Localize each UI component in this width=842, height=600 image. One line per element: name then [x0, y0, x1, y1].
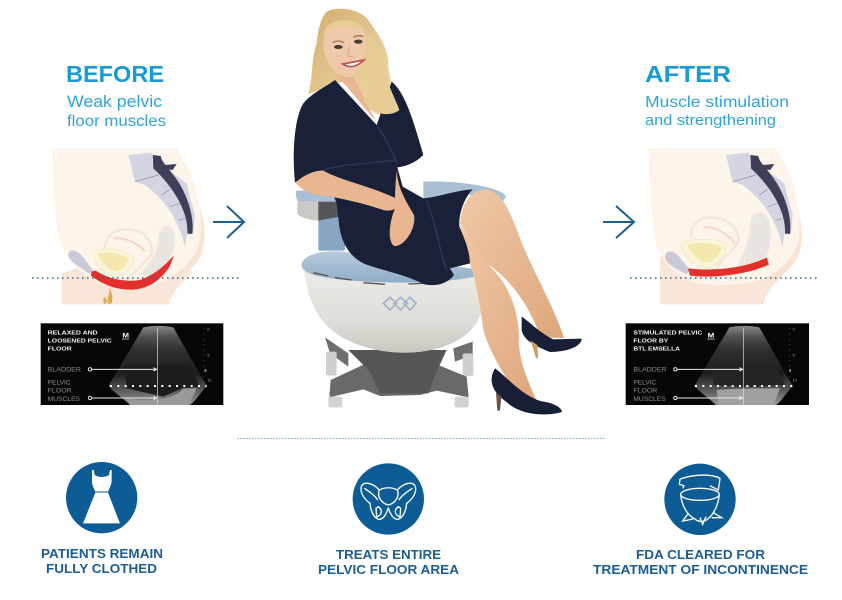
hair back: [308, 9, 400, 116]
caption: fda cleared: TREATMENT OF INCONTINENCE: [593, 562, 808, 577]
icon: dress: [66, 462, 137, 533]
face: [323, 23, 367, 77]
caption: patients remain fully clothed: [41, 546, 163, 576]
ultrasound panel: after: STIMULATED PELVIC: [633, 330, 702, 336]
arms and hands: [296, 168, 414, 246]
arrow: before to device: [213, 206, 244, 238]
heading: after: AFTER: [645, 61, 731, 87]
dotted line: after: [630, 277, 819, 279]
caption: fda cleared: FDA CLEARED FOR: [636, 547, 766, 562]
dotted divider: [237, 438, 605, 440]
ultrasound panel: before: MUSCLES: [48, 396, 80, 403]
caption: treats entire pelvic floor area: [318, 547, 460, 577]
heading: after: Muscle stimulation: [645, 94, 789, 111]
icon: pelvis: [353, 463, 424, 535]
ultrasound panel: after: FLOOR BY: [633, 338, 669, 344]
ultrasound panel: before: 0: [207, 328, 209, 332]
caption: fda cleared: [593, 547, 808, 577]
heading: before: floor muscles: [67, 113, 166, 130]
arrow: device to after: [603, 206, 634, 238]
icon: chair: [664, 464, 736, 535]
dress folds: [323, 125, 447, 270]
ultrasound panel: before: BLADDER: [48, 367, 81, 374]
ultrasound panel: before: [41, 323, 223, 405]
dotted line: before: [32, 277, 241, 279]
ultrasound panel: after: BLADDER: [633, 367, 667, 374]
ultrasound panel: after: [626, 323, 809, 405]
legs and shoes: [459, 189, 582, 414]
heading: before: [66, 61, 166, 130]
ultrasound panel: before: 10: [207, 379, 211, 383]
heading: before: BEFORE: [66, 61, 164, 87]
hair front: [324, 20, 399, 114]
ultrasound panel: after: BTL EMSELLA: [633, 346, 680, 352]
ultrasound panel: before: FLOOR: [48, 387, 72, 394]
ultrasound panel: after: PELVIC: [633, 379, 657, 386]
ultrasound panel: after: 5: [793, 354, 795, 358]
chair: [296, 181, 506, 407]
ultrasound panel: before: M: [122, 332, 130, 339]
neck and chest: [336, 75, 376, 122]
chair logo: [383, 297, 416, 310]
ultrasound panel: before: FLOOR: [48, 346, 72, 352]
heading: after: [645, 61, 789, 129]
ultrasound panel: before: 5: [207, 354, 209, 358]
caption: treats entire pelvic floor area: PELVIC FLOOR AREA: [318, 562, 460, 577]
caption: treats entire pelvic floor area: TREATS ENTIRE: [336, 547, 441, 562]
ultrasound panel: before: RELAXED AND: [48, 330, 98, 336]
ultrasound panel: after: FLOOR: [633, 387, 658, 394]
ultrasound panel: after: 0: [793, 328, 795, 332]
anatomy diagram: after: [648, 148, 802, 304]
ultrasound panel: before: PELVIC: [48, 379, 71, 386]
dress: [294, 80, 473, 285]
woman seated on pelvic floor chair: [294, 9, 582, 414]
heading: before: Weak pelvic: [67, 93, 162, 111]
ultrasound panel: after: M: [708, 332, 715, 339]
ultrasound panel: after: MUSCLES: [633, 396, 666, 403]
caption: patients remain fully clothed: PATIENTS REMAIN: [41, 546, 163, 561]
ultrasound panel: after: 10: [793, 379, 797, 383]
heading: after: and strengthening: [645, 112, 776, 129]
ultrasound panel: before: LOOSENED PELVIC: [48, 338, 112, 344]
caption: patients remain fully clothed: FULLY CLOTHED: [46, 561, 157, 576]
anatomy diagram: before: [52, 148, 204, 304]
